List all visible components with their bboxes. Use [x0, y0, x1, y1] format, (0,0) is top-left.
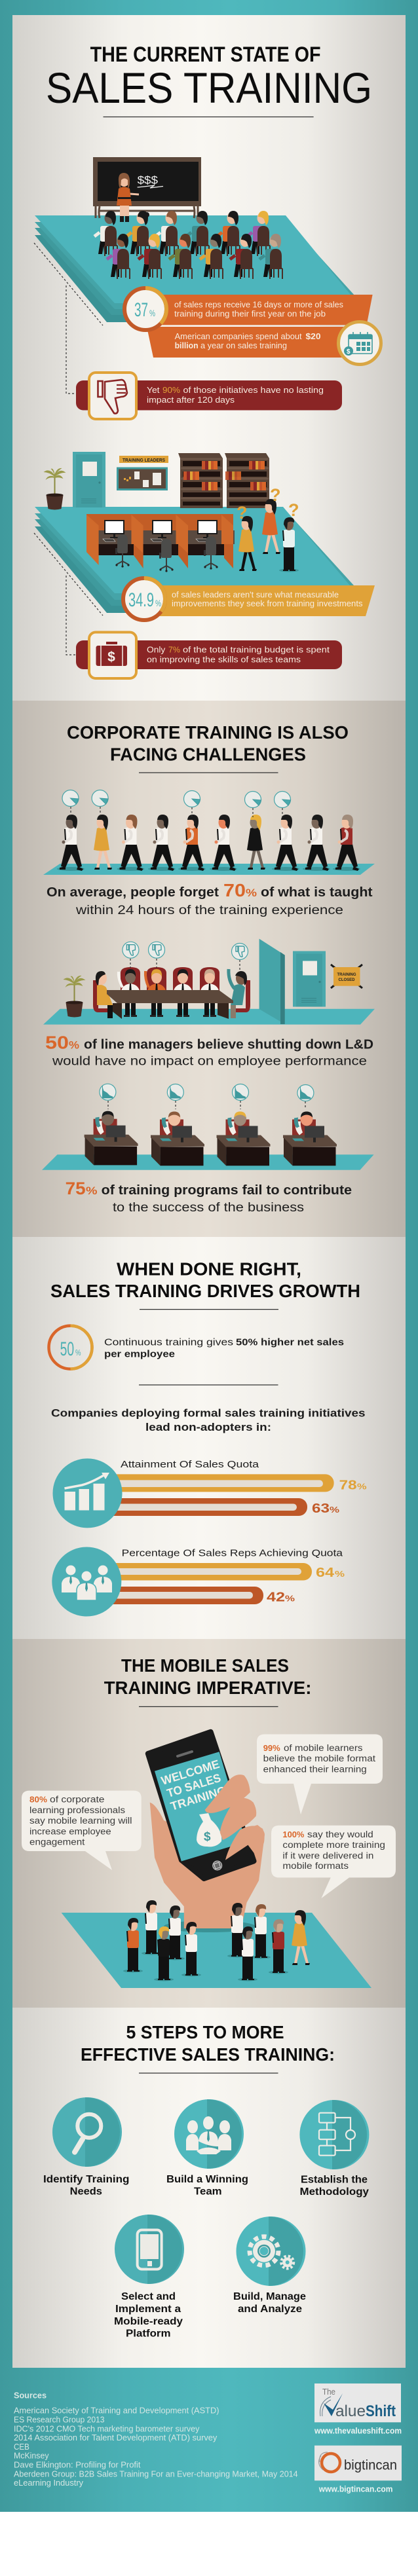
speech bubble: 80%: engagement — [29, 1837, 85, 1847]
title — [46, 43, 372, 117]
hand palm — [150, 1803, 265, 1928]
banner: 34.9% stat: improvements they seek from training investments — [172, 598, 363, 608]
bar: 42%: 42 — [267, 1591, 285, 1605]
callout: 90% no lasting impact: of those initiatives have no lasting — [183, 385, 324, 395]
callout: 7% of budget: of the total training budget is spent — [183, 644, 330, 655]
step 2: build a winning team: Team — [194, 2186, 222, 2198]
confused people with question marks: ? — [237, 503, 248, 523]
logo: the value shift — [314, 2383, 402, 2436]
banner: 34.9% stat: of sales leaders aren't sure what measurable — [172, 589, 339, 600]
panel: 5 steps — [12, 2008, 406, 2368]
callout: 90% no lasting impact: 90% — [162, 385, 180, 395]
chart: percentage of sales reps achieving quota — [52, 1547, 345, 1616]
panel: corporate training challenges — [12, 701, 406, 1237]
speech bubble: 80% — [22, 1791, 142, 1870]
footer: sources: Dave Elkington: Profiling for Profit — [14, 2460, 141, 2469]
stat text: 70% forget: of what is taught — [261, 885, 373, 900]
step 3: establish the methodology: Methodology — [300, 2186, 369, 2198]
notice board — [117, 468, 168, 490]
dashed connector lines — [34, 243, 103, 394]
logo: the value shift: www.thevalueshift.com — [314, 2427, 402, 2436]
callout: 90% no lasting impact: Yet — [147, 385, 160, 395]
icon: calendar with dollar: $ — [347, 348, 351, 356]
speech bubble: 100%: 100% — [282, 1830, 305, 1839]
stat text: 75% fail: 75 — [66, 1179, 86, 1198]
stat ring: 50%: % — [75, 1348, 81, 1357]
bookshelves — [178, 453, 269, 508]
screen text — [160, 1757, 228, 1813]
heading — [104, 1655, 311, 1706]
bar: 42% — [98, 1587, 295, 1605]
banner: 37% stat: of sales reps receive 16 days or more of sales — [174, 300, 343, 309]
sign: training closed: TRAINING — [337, 973, 356, 977]
speech bubble: 99% — [257, 1734, 383, 1814]
heading: EFFECTIVE SALES TRAINING: — [81, 2044, 335, 2065]
icon: thumbs down — [89, 373, 136, 419]
icon: three business people — [52, 1547, 121, 1616]
chart: attainment of sales quota — [52, 1458, 367, 1528]
sign: training closed — [331, 965, 362, 988]
speech bubble: 80%: say mobile learning will — [29, 1816, 132, 1826]
footer: sources: McKinsey — [14, 2452, 49, 2461]
stat text: continuous training: per employee — [104, 1350, 175, 1360]
banner: 37% stat — [124, 288, 381, 364]
stat ring: 37%: % — [149, 308, 155, 318]
side seated person: left — [93, 971, 113, 1018]
stat text: 50% of line managers: of line managers believe shutting down L&D — [84, 1037, 373, 1052]
subheading: Companies deploying formal sales training initiatives — [51, 1407, 366, 1420]
phone body — [148, 1732, 254, 1879]
banner: 37% stat: billion — [175, 340, 199, 350]
screen text: TO SALES — [165, 1771, 222, 1800]
step 4: select and implement a mobile-ready platform: Select and — [121, 2291, 176, 2302]
stat text: 50% of line managers — [45, 1032, 373, 1069]
callout: 7% of budget: 7% — [168, 644, 180, 655]
logo: the value shift: alue — [335, 2402, 366, 2420]
banner: 37% stat: American companies spend about — [175, 331, 302, 341]
walking people scene — [43, 790, 375, 875]
heading: TRAINING IMPERATIVE: — [104, 1678, 311, 1698]
footer: sources — [14, 2390, 298, 2488]
meeting room scene — [43, 939, 375, 1025]
step 3: establish the methodology: Establish the — [301, 2175, 368, 2186]
speech bubble: 99%: enhanced their learning — [263, 1765, 367, 1775]
step 3: establish the methodology — [299, 2100, 369, 2198]
footer: sources: Sources — [14, 2390, 47, 2400]
step 5: build, manage and analyze: Build, Manage — [233, 2291, 306, 2302]
sign: training leaders: TRAINING LEADERS — [123, 458, 165, 463]
stat text: 70% forget: On average, people forget — [47, 885, 219, 900]
students seated — [94, 211, 282, 279]
screen text: TRAINING — [169, 1784, 228, 1813]
panel: the mobile sales training imperative — [12, 1639, 406, 2008]
step 1: identify training needs: Needs — [70, 2186, 102, 2198]
fingers — [205, 1775, 265, 1860]
stat ring: 34.9%: 34.9 — [128, 589, 154, 611]
heading: SALES TRAINING DRIVES GROWTH — [50, 1281, 360, 1301]
bar: 64%: 64 — [316, 1566, 335, 1580]
step 2: build a winning team — [166, 2099, 248, 2198]
logo: bigtincan: bigtincan — [344, 2458, 397, 2473]
logo: the value shift: Shift — [366, 2402, 396, 2420]
conference table — [107, 990, 233, 1019]
step 5: build, manage and analyze — [233, 2217, 306, 2315]
blackboard: $$$ — [138, 174, 159, 186]
step 2: build a winning team: Build a Winning — [166, 2174, 248, 2185]
footer: sources: 2014 Association for Talent Development (ATD) survey — [14, 2433, 218, 2442]
stat ring: 34.9%: % — [155, 598, 161, 608]
heading: FACING CHALLENGES — [110, 744, 306, 765]
speech bubble: 100%: mobile formats — [282, 1861, 349, 1871]
icon: briefcase with dollar: $ — [107, 650, 115, 665]
panel: when done right — [12, 1237, 406, 1639]
speech bubble: 99%: of mobile learners — [284, 1743, 363, 1753]
bar: 63% — [98, 1498, 340, 1516]
layered teal platform: classroom — [35, 215, 367, 322]
banner: 37% stat: $20 — [305, 331, 321, 341]
footer: sources: ES Research Group 2013 — [14, 2415, 105, 2424]
callout: 7% of budget: on improving the skills of sales teams — [147, 655, 301, 664]
bar: 78%: % — [357, 1482, 367, 1492]
heading: CORPORATE TRAINING IS ALSO — [67, 722, 349, 743]
stat ring: 50% — [48, 1326, 92, 1369]
sign: training closed: CLOSED — [338, 978, 355, 982]
dashed connector lines — [34, 533, 103, 655]
confused people with question marks: ? — [288, 500, 299, 520]
step 5: build, manage and analyze: and Analyze — [238, 2304, 302, 2315]
footer: sources: IDC's 2012 CMO Tech marketing barometer survey — [14, 2424, 200, 2433]
speech bubble: 100%: if it were delivered in — [282, 1851, 373, 1861]
banner: 34.9% stat — [123, 578, 375, 620]
banner: 37% stat: a year on sales training — [200, 340, 287, 350]
step 1: identify training needs — [43, 2097, 129, 2198]
heading — [81, 2022, 335, 2073]
stat ring: 34.9% — [123, 578, 165, 620]
speech bubble: 80%: increase employee — [29, 1827, 111, 1837]
stat text: 50% of line managers: 50 — [45, 1032, 69, 1053]
door — [73, 452, 105, 507]
callout: 7% of budget — [76, 633, 342, 678]
stat text: continuous training — [104, 1338, 344, 1360]
bar: 63%: % — [330, 1505, 340, 1515]
sign: training leaders — [119, 456, 168, 463]
title: THE CURRENT STATE OF — [90, 43, 321, 66]
layered teal platform: training office — [35, 507, 367, 613]
logo: bigtincan — [314, 2446, 402, 2494]
phone screen — [155, 1752, 246, 1861]
speech bubble: 99%: 99% — [263, 1743, 280, 1753]
subheading: lead non-adopters in: — [145, 1421, 271, 1433]
heading: WHEN DONE RIGHT, — [117, 1259, 301, 1279]
logo: the value shift: The — [322, 2387, 335, 2397]
chart: attainment of sales quota: Attainment Of Sales Quota — [121, 1460, 259, 1470]
heading: 5 STEPS TO MORE — [126, 2022, 284, 2042]
blackboard — [93, 157, 201, 218]
bar: 78% — [98, 1474, 367, 1493]
icon: briefcase with dollar — [89, 633, 136, 678]
bar: 64%: % — [335, 1569, 345, 1579]
bar: 42%: % — [285, 1594, 295, 1604]
step 4: select and implement a mobile-ready platform: Mobile-ready — [114, 2316, 183, 2327]
footer: sources: American Society of Training and Development (ASTD) — [14, 2406, 219, 2416]
stat text: continuous training: 50% higher net sales — [236, 1338, 344, 1348]
stat ring: 37% — [124, 288, 166, 330]
heading — [50, 1259, 360, 1310]
stat text: 70% forget: within 24 hours of the training experience — [75, 904, 343, 917]
speech bubble: 100%: complete more training — [282, 1840, 385, 1850]
step 1: identify training needs: Identify Training — [43, 2174, 129, 2185]
stat text: 75% fail: % — [86, 1185, 97, 1197]
stat text: 50% of line managers: % — [69, 1039, 79, 1052]
title: SALES TRAINING — [46, 64, 372, 112]
speech bubble: 80%: 80% — [29, 1795, 47, 1805]
side seated person: right — [229, 969, 250, 1018]
speech bubble: 99%: believe the mobile format — [263, 1754, 375, 1763]
workers at desks scene — [42, 1084, 374, 1170]
logo: bigtincan: www.bigtincan.com — [318, 2485, 393, 2494]
illustration: hand holding phone — [148, 1732, 265, 1928]
panel: the current state of sales training — [12, 15, 406, 701]
footer: sources: CEB — [14, 2442, 29, 2452]
footer: sources: Aberdeen Group: B2B Sales Training For an Ever-changing Market, May 2014 — [14, 2469, 298, 2478]
icon: rising bar chart — [52, 1458, 122, 1528]
icon: calendar with dollar — [338, 322, 381, 364]
step 4: select and implement a mobile-ready platform: Platform — [126, 2328, 170, 2340]
crowd of people looking up — [123, 1900, 310, 1981]
stat text: 75% fail: of training programs fail to contribute — [102, 1183, 352, 1198]
stat text: 70% forget: % — [246, 887, 257, 899]
plant — [43, 468, 66, 509]
screen text: WELCOME — [160, 1757, 221, 1788]
callout: 90% no lasting impact: impact after 120 days — [147, 395, 235, 405]
subheading — [51, 1407, 366, 1433]
stat text: 70% forget: 70 — [223, 880, 246, 900]
banner: 37% stat: training during their first year on the job — [174, 309, 326, 318]
stat text: 75% fail — [66, 1179, 352, 1215]
stat text: 75% fail: to the success of the business — [113, 1201, 304, 1215]
callout: 90% no lasting impact — [76, 373, 342, 419]
speech bubble: 100% — [271, 1826, 396, 1898]
cubicles with computers — [86, 514, 235, 572]
callout: 7% of budget: Only — [147, 644, 166, 655]
stat text: continuous training: Continuous training gives — [104, 1338, 233, 1348]
confused people with question marks — [237, 485, 299, 572]
stat ring: 37%: 37 — [134, 299, 148, 321]
heading: THE MOBILE SALES — [121, 1655, 289, 1676]
stat ring: 50%: 50 — [60, 1338, 74, 1360]
chart: percentage of sales reps achieving quota: Percentage Of Sales Reps Achieving Quota — [122, 1549, 343, 1559]
stat text: 50% of line managers: would have no impact on employee performance — [52, 1054, 367, 1069]
bar: 63%: 63 — [312, 1501, 330, 1516]
bar: 64% — [98, 1563, 345, 1581]
speech bubble: 100%: say they would — [307, 1830, 373, 1839]
icon: money bag — [197, 1813, 221, 1847]
footer: sources: eLearning Industry — [14, 2478, 84, 2488]
teal platform — [62, 1913, 371, 1988]
confused people with question marks: ? — [270, 485, 280, 505]
speech bubble: 80%: of corporate — [50, 1795, 105, 1805]
bar: 78%: 78 — [339, 1479, 357, 1493]
icon: money bag: $ — [204, 1830, 211, 1844]
speech bubble: 80%: learning professionals — [29, 1805, 125, 1815]
heading — [67, 722, 349, 773]
step 4: select and implement a mobile-ready platform — [114, 2215, 184, 2340]
teacher figure — [117, 173, 139, 222]
step 4: select and implement a mobile-ready platform: Implement a — [115, 2304, 181, 2315]
stat text: 70% forget — [47, 880, 373, 917]
